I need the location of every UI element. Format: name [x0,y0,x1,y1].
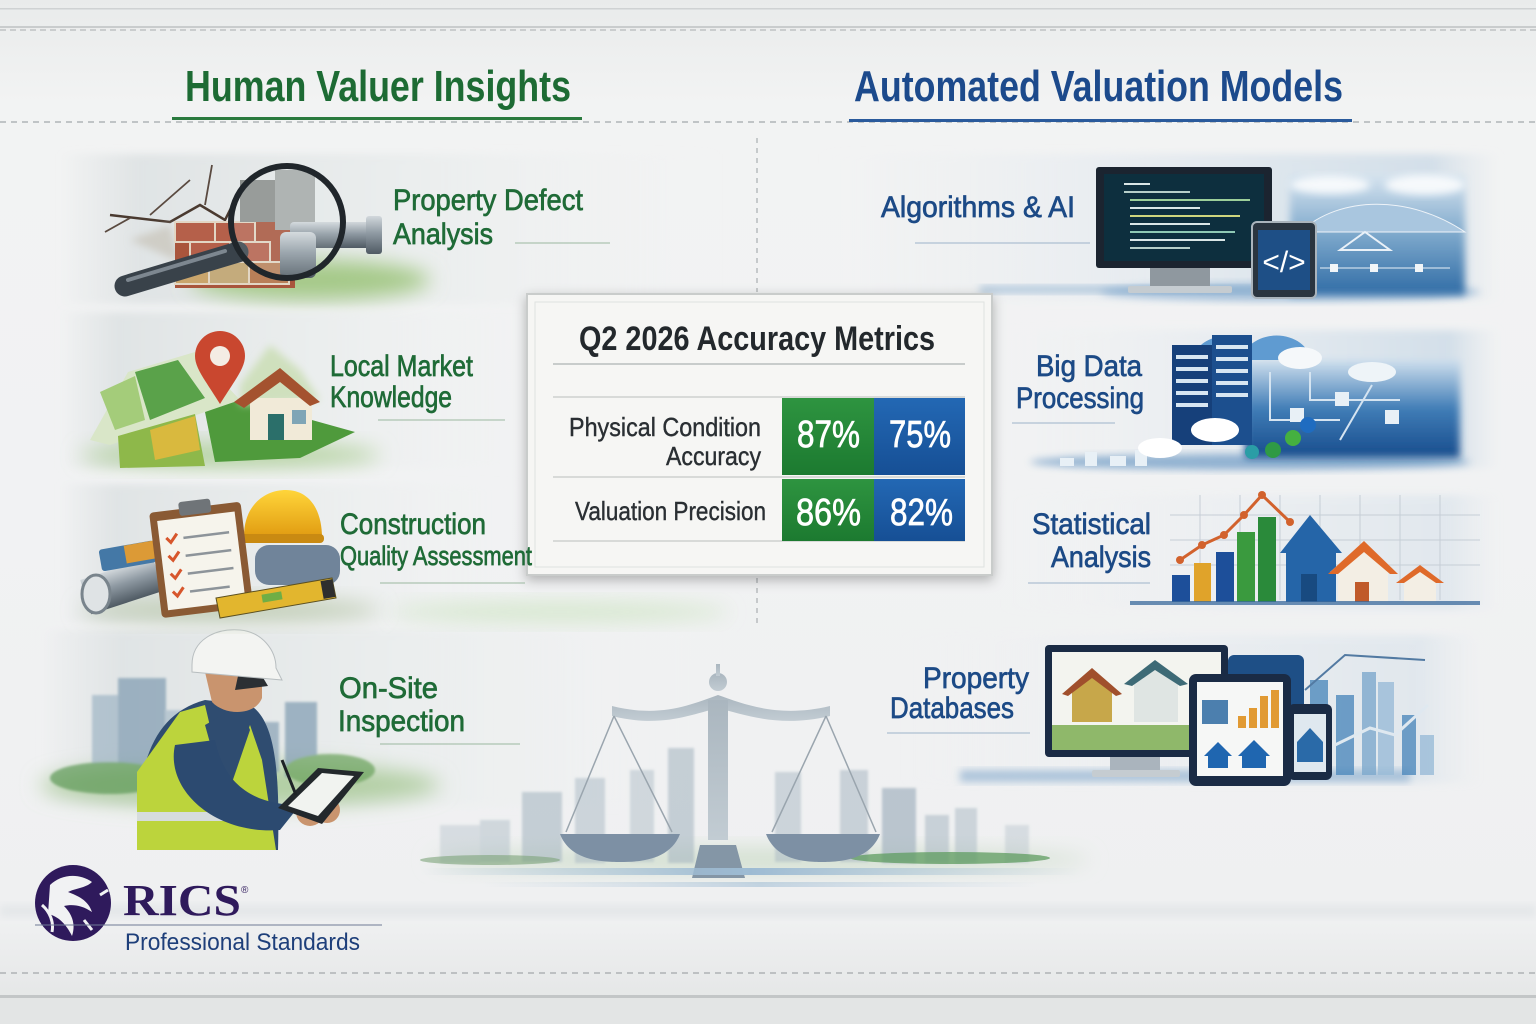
icon: pipe [280,216,382,278]
bar chart with trend line [1172,491,1294,602]
icon: RICS lion crest [35,865,111,941]
icon: inspection clipboard [278,760,364,824]
icon: clipboard checklist [148,495,253,618]
illustration: blue network backdrop [980,175,1465,295]
metrics title: Q2 2026 Accuracy Metrics [579,320,935,358]
row: physical condition accuracy [569,398,965,475]
label: Algorithms and AI: Algorithms & AI [881,191,1075,224]
row: valuation precision: 86% [796,492,861,534]
panel: statistical analysis [1000,491,1500,610]
label: Statistical Analysis: Analysis [1051,541,1151,574]
icon: houses [1130,515,1480,605]
label: Local Market Knowledge [330,350,505,420]
label: Big Data Processing: Big Data [1036,350,1142,383]
panel: property defect analysis [60,154,720,304]
panel: construction quality assessment [60,484,730,622]
row: physical condition accuracy: Physical Condition [569,412,761,442]
label: Construction Quality Assessment: Quality Assessment [340,541,532,571]
chart grid [1170,495,1480,600]
illustration: data city [1060,336,1460,466]
illustration: city skyline behind worker [50,678,375,794]
icon: desktop monitor with houses [1045,645,1228,777]
panel: on-site inspection [40,630,720,850]
label: Property Databases: Databases [890,692,1014,725]
skyline [440,748,1029,863]
left pan [560,716,680,862]
label: Big Data Processing: Processing [1016,382,1144,415]
logo: RICS Professional Standards: RICS [123,876,241,925]
icon: monitor with code [1096,167,1272,293]
row: physical condition accuracy: Accuracy [666,441,761,471]
icon: tablets [1189,655,1332,786]
heading: Human Valuer Insights: Human Valuer Insights [185,62,571,111]
icon: clouds and data nodes [1138,417,1316,459]
panel: Q2 2026 accuracy metrics [527,294,992,575]
right pan [766,716,880,862]
icon: server towers [1172,335,1252,445]
heading: Automated Valuation Models: Automated Valuation Models [854,62,1343,111]
label: Property Databases [887,662,1030,733]
label: Big Data Processing [1012,350,1144,423]
label: Property Defect Analysis: Analysis [393,218,493,251]
label: Construction Quality Assessment: Construction [340,508,486,541]
label: On-Site Inspection: On-Site [339,672,438,705]
icon: hard hat [240,490,340,585]
row: valuation precision [575,479,965,541]
icon: inspector worker [137,630,340,850]
icon: house [234,368,320,440]
illustration: balance scales over skyline [420,664,1090,887]
label: Property Defect Analysis [393,184,610,251]
label: Statistical Analysis: Statistical [1032,508,1151,541]
label: Local Market Knowledge: Local Market [330,350,474,383]
icon: pipes and materials [80,540,164,614]
row: valuation precision: 82% [890,492,953,534]
label: On-Site Inspection: Inspection [338,705,465,738]
panel: property databases [887,635,1480,786]
label: Statistical Analysis [1028,508,1151,583]
heading: Automated Valuation Models [849,62,1352,122]
icon: cracked brick wall [105,165,315,288]
icon: spirit level [216,578,336,618]
label: Construction Quality Assessment [340,508,532,583]
logo: RICS Professional Standards: ® [241,885,249,896]
label: On-Site Inspection [338,672,520,744]
panel: big data processing [1000,330,1500,470]
label: Property Defect Analysis: Property Defect [393,184,584,217]
chart: background bars [1305,655,1434,775]
icon: magnifying glass [125,166,343,286]
label: Property Databases: Property [923,662,1029,695]
label: Local Market Knowledge: Knowledge [330,381,452,414]
row: physical condition accuracy: 75% [889,414,951,456]
icon: map [90,345,355,468]
icon: location pin [195,331,245,404]
icon: tablet with code symbol [1252,222,1316,298]
row: valuation precision: Valuation Precision [575,496,766,526]
logo: RICS Professional Standards [35,865,382,956]
logo: RICS Professional Standards: Professional Standards [125,929,360,956]
row: physical condition accuracy: 87% [797,414,860,456]
scale column and beam [612,664,830,878]
panel: algorithms and AI [820,154,1500,301]
panel: local market knowledge [60,312,540,468]
icon: tablet with code symbol: </> [1262,246,1306,279]
